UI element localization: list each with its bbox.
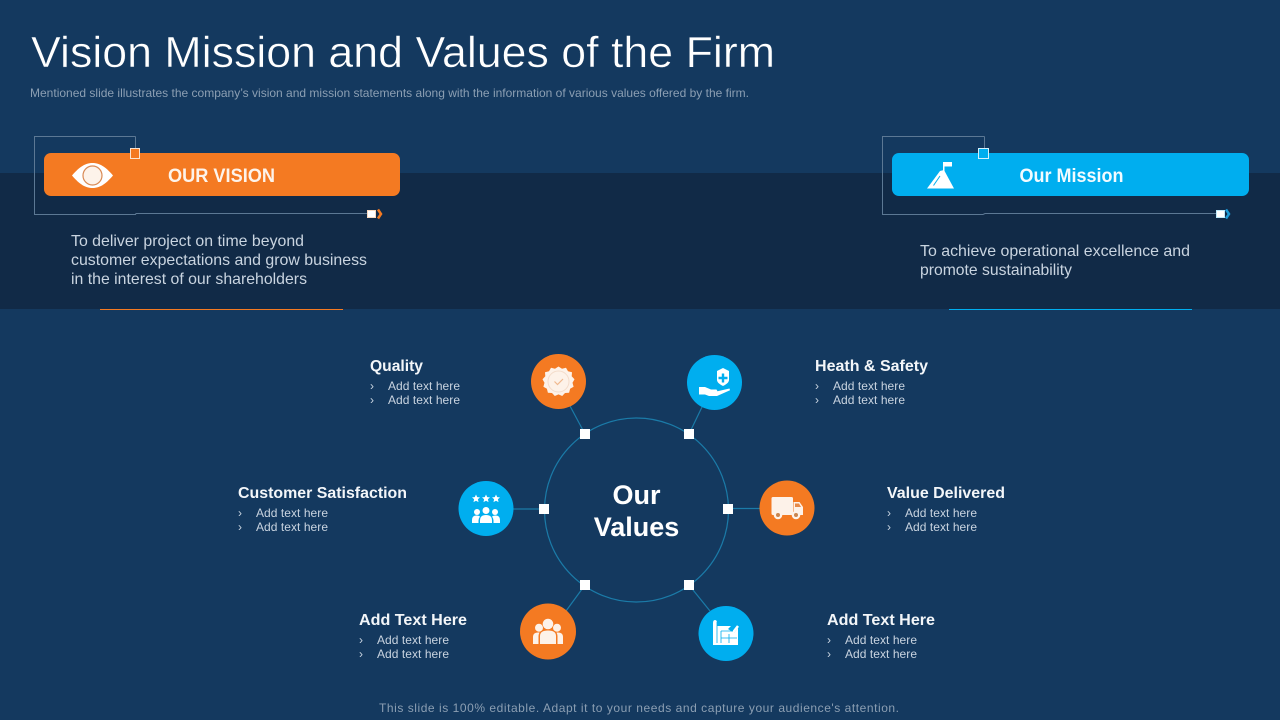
connector lines bbox=[513, 406, 760, 611]
hub circle bbox=[544, 418, 728, 602]
icon: mountain flag bbox=[927, 162, 954, 188]
vision statement bbox=[71, 233, 367, 288]
icon: delivery truck bbox=[760, 480, 814, 536]
text block: value delivered: Value Delivered bbox=[887, 485, 1005, 502]
text block: value delivered: Add text here bbox=[905, 506, 977, 520]
text block: quality bbox=[370, 358, 460, 407]
text block: add text here left: › bbox=[359, 633, 363, 647]
subtitle: Mentioned slide illustrates the company’s vision and mission statements along with the information of various values offered by the firm. bbox=[30, 86, 749, 100]
text block: customer satisfaction bbox=[238, 485, 407, 534]
text block: health and safety: Heath & Safety bbox=[815, 358, 928, 375]
panel: our mission bbox=[882, 136, 1249, 310]
text block: add text here right: › bbox=[827, 647, 831, 661]
text block: add text here left bbox=[359, 612, 467, 661]
text block: health and safety: Add text here bbox=[833, 393, 905, 407]
text block: quality: Add text here bbox=[388, 379, 460, 393]
icon: hand with medical shield bbox=[687, 355, 742, 410]
panel: our vision bbox=[34, 136, 400, 310]
text block: value delivered: › bbox=[887, 506, 891, 520]
text block: customer satisfaction: Add text here bbox=[256, 520, 328, 534]
mission statement: To achieve operational excellence and bbox=[920, 243, 1190, 260]
text block: add text here right: Add text here bbox=[845, 633, 917, 647]
text block: health and safety: Add text here bbox=[833, 379, 905, 393]
diagram: our values hub bbox=[513, 406, 760, 611]
node markers bbox=[539, 429, 733, 590]
hub label bbox=[594, 480, 679, 542]
text block: add text here left: Add text here bbox=[377, 647, 449, 661]
vision line end marker bbox=[368, 210, 381, 218]
text block: customer satisfaction: › bbox=[238, 520, 242, 534]
text block: value delivered bbox=[887, 485, 1005, 534]
text block: customer satisfaction: Add text here bbox=[256, 506, 328, 520]
text block: add text here left: Add Text Here bbox=[359, 612, 467, 629]
mission statement: promote sustainability bbox=[920, 262, 1072, 279]
icon: customers with stars bbox=[458, 481, 514, 536]
vision underline bbox=[100, 309, 343, 310]
text block: quality: Add text here bbox=[388, 393, 460, 407]
text block: health and safety: › bbox=[815, 379, 819, 393]
title: Vision Mission and Values of the Firm bbox=[31, 28, 775, 77]
icon: quality badge bbox=[531, 354, 586, 409]
icon: team bbox=[520, 604, 576, 660]
text block: health and safety: › bbox=[815, 393, 819, 407]
text block: quality: › bbox=[370, 379, 374, 393]
vision statement: customer expectations and grow business bbox=[71, 252, 367, 269]
text block: add text here right: Add text here bbox=[845, 647, 917, 661]
icon: eye bbox=[72, 163, 113, 188]
text block: add text here right: Add Text Here bbox=[827, 612, 935, 629]
text block: customer satisfaction: › bbox=[238, 506, 242, 520]
vision corner marker bbox=[130, 148, 140, 158]
footer note: This slide is 100% editable. Adapt it to your needs and capture your audience's attention. bbox=[379, 701, 899, 715]
mission corner marker bbox=[978, 148, 988, 158]
vision banner bbox=[44, 153, 400, 196]
mission line end marker bbox=[1216, 210, 1229, 218]
text block: value delivered: › bbox=[887, 520, 891, 534]
text block: quality: Quality bbox=[370, 358, 423, 375]
text block: quality: › bbox=[370, 393, 374, 407]
text block: value delivered: Add text here bbox=[905, 520, 977, 534]
text block: health and safety bbox=[815, 358, 928, 407]
icon: blueprint bbox=[698, 606, 754, 661]
mission statement bbox=[920, 243, 1190, 279]
text block: add text here right: › bbox=[827, 633, 831, 647]
vision heading: OUR VISION bbox=[168, 165, 275, 187]
mission underline bbox=[949, 309, 1192, 310]
text block: customer satisfaction: Customer Satisfaction bbox=[238, 485, 407, 502]
hub label: Values bbox=[594, 512, 679, 542]
panel: dark band behind vision and mission bbox=[0, 173, 1280, 309]
mission heading: Our Mission bbox=[1020, 165, 1124, 187]
mission banner bbox=[892, 153, 1249, 196]
vision statement: in the interest of our shareholders bbox=[71, 271, 307, 288]
text block: add text here right bbox=[827, 612, 935, 661]
text block: add text here left: Add text here bbox=[377, 633, 449, 647]
text block: add text here left: › bbox=[359, 647, 363, 661]
vision statement: To deliver project on time beyond bbox=[71, 233, 304, 250]
hub label: Our bbox=[612, 480, 661, 510]
